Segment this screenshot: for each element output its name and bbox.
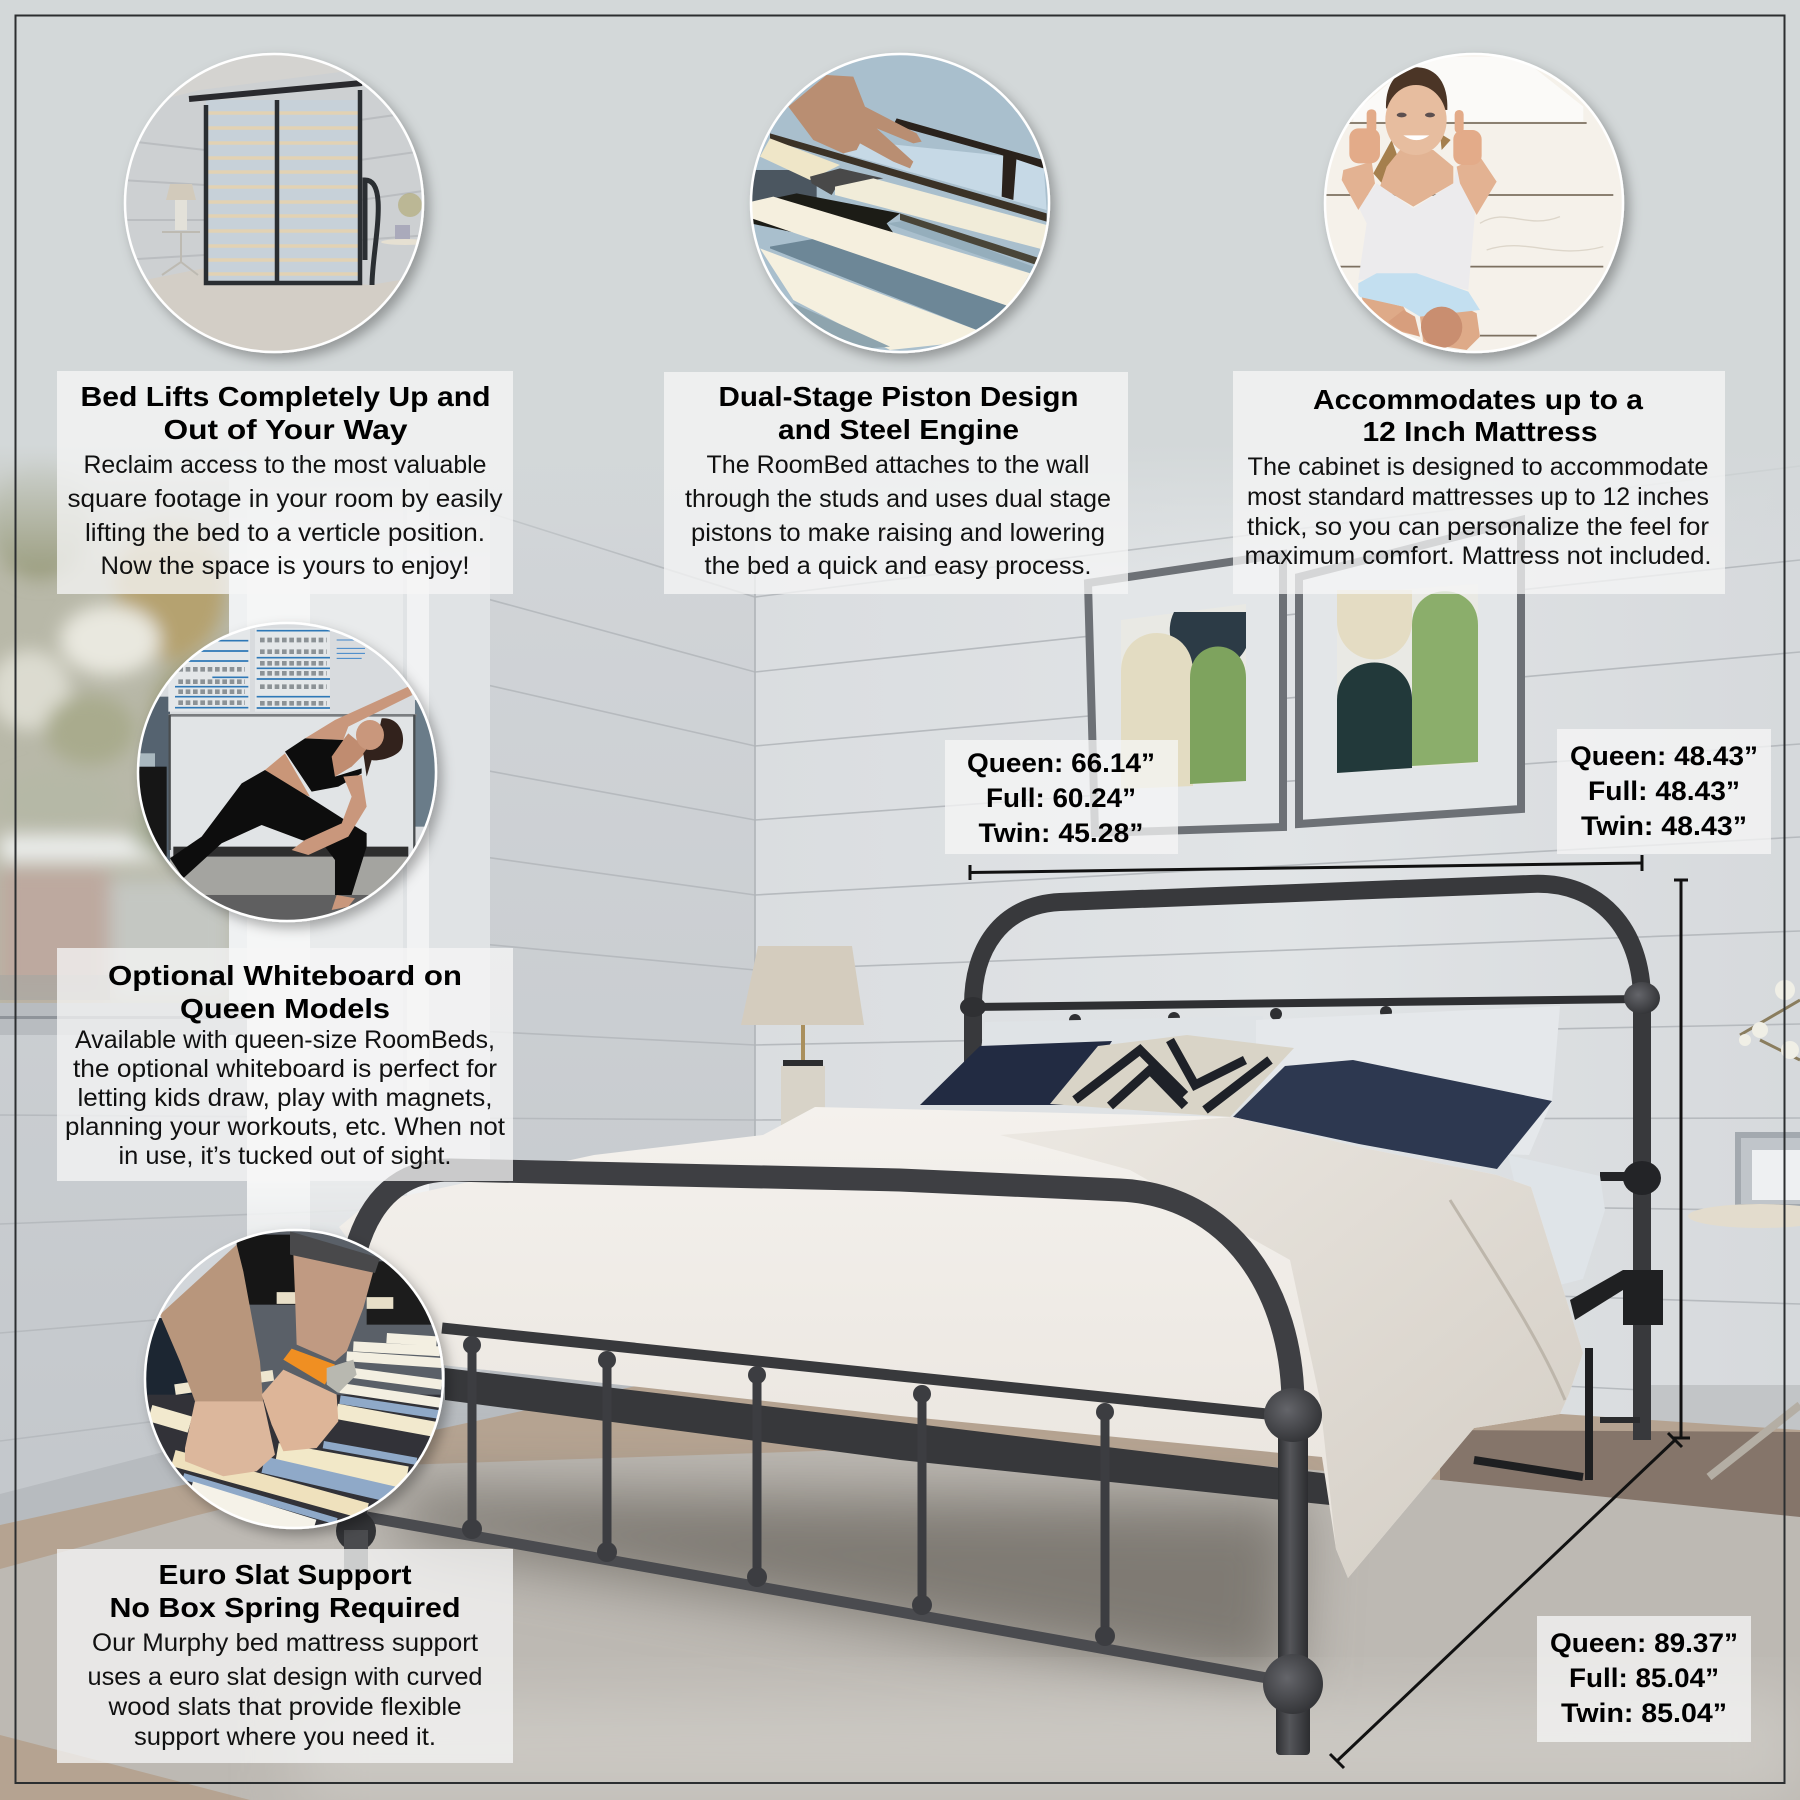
ring xyxy=(125,54,423,352)
photo: bed lifted against wall xyxy=(120,50,430,360)
dimension label: length: Full: 85.04” xyxy=(1569,1663,1719,1693)
body copy: The RoomBed attaches to the wall xyxy=(706,451,1090,479)
photo: slats and steel engine xyxy=(750,50,1050,355)
rug xyxy=(0,1445,1800,1800)
body copy: lifting the bed to a verticle position. xyxy=(85,519,485,547)
dimension label: height: Twin: 48.43” xyxy=(1581,811,1747,841)
body copy: pistons to make raising and lowering xyxy=(691,519,1105,547)
window view xyxy=(0,440,247,1050)
frame rear xyxy=(1474,1270,1640,1480)
body copy xyxy=(65,1026,505,1170)
body copy: wood slats that provide flexible xyxy=(107,1693,462,1721)
body copy xyxy=(685,451,1111,580)
dimension label: width xyxy=(945,740,1178,854)
arrow: length dimension line xyxy=(1330,1433,1682,1768)
body copy xyxy=(68,451,503,580)
body copy: Available with queen-size RoomBeds, xyxy=(75,1026,495,1054)
curtain xyxy=(247,532,490,1371)
headboard xyxy=(960,884,1663,1440)
heading line 2: Queen Models xyxy=(180,993,390,1024)
photo: hands adjusting euro slats xyxy=(140,1228,445,1533)
heading: Optional Whiteboard on xyxy=(108,960,462,991)
ring xyxy=(751,54,1049,352)
dimension label: width: Queen: 66.14” xyxy=(967,748,1155,778)
body copy: letting kids draw, play with magnets, xyxy=(78,1084,492,1112)
ring xyxy=(145,1230,443,1528)
pillows xyxy=(920,1006,1560,1169)
body copy: in use, it’s tucked out of sight. xyxy=(118,1142,451,1170)
heading: Dual-Stage Piston Design xyxy=(718,381,1078,412)
text panel: mattress xyxy=(1233,371,1725,594)
photo: yoga in front of whiteboard xyxy=(135,620,440,925)
side table with picture and plant xyxy=(1688,980,1800,1477)
text panel: euro slat support xyxy=(57,1549,513,1763)
text panel: piston design xyxy=(664,372,1128,594)
text panel: whiteboard xyxy=(57,948,513,1181)
dimension label: width: Twin: 45.28” xyxy=(978,818,1144,848)
dimension label: length xyxy=(1537,1616,1751,1742)
body copy: Now the space is yours to enjoy! xyxy=(100,552,470,580)
heading line 2: No Box Spring Required xyxy=(110,1592,460,1623)
photo: woman with thumbs up on mattress xyxy=(1320,50,1625,355)
bed xyxy=(336,884,1663,1755)
body copy: square footage in your room by easily xyxy=(68,485,503,513)
dimension label: length: Twin: 85.04” xyxy=(1561,1698,1727,1728)
body copy: through the studs and uses dual stage xyxy=(685,485,1111,513)
heading: Bed Lifts Completely Up and xyxy=(80,381,490,412)
body copy: most standard mattresses up to 12 inches xyxy=(1247,483,1709,511)
body copy: planning your workouts, etc. When not xyxy=(65,1113,505,1141)
body copy: support where you need it. xyxy=(134,1723,436,1751)
duvet xyxy=(339,1107,1583,1578)
dimension label: height xyxy=(1557,729,1771,854)
body copy: uses a euro slat design with curved xyxy=(88,1663,482,1691)
dimension label: height: Queen: 48.43” xyxy=(1570,741,1758,771)
body copy xyxy=(1244,453,1712,570)
footboard xyxy=(336,1170,1323,1755)
body copy: Our Murphy bed mattress support xyxy=(92,1629,478,1657)
heading line 2: and Steel Engine xyxy=(778,414,1019,445)
room background xyxy=(0,460,1800,1800)
dimension label: length: Queen: 89.37” xyxy=(1550,1628,1738,1658)
side rail xyxy=(445,1368,1330,1505)
text panel: bed lifts xyxy=(57,371,513,594)
body copy: maximum comfort. Mattress not included. xyxy=(1244,542,1712,570)
body copy xyxy=(88,1629,482,1751)
arrow: height dimension line xyxy=(1672,880,1690,1438)
lamp xyxy=(741,946,864,1126)
mattress side xyxy=(1508,1155,1605,1290)
heading: Accommodates up to a xyxy=(1313,384,1643,415)
heading line 2: Out of Your Way xyxy=(164,414,408,445)
ring xyxy=(138,623,436,921)
dimension label: width: Full: 60.24” xyxy=(986,783,1136,813)
body copy: the bed a quick and easy process. xyxy=(704,552,1092,580)
arrow: width dimension line xyxy=(970,855,1642,880)
body copy: Reclaim access to the most valuable xyxy=(84,451,486,479)
dimension label: height: Full: 48.43” xyxy=(1588,776,1740,806)
body copy: the optional whiteboard is perfect for xyxy=(73,1055,497,1083)
body copy: The cabinet is designed to accommodate xyxy=(1248,453,1708,481)
heading line 2: 12 Inch Mattress xyxy=(1362,416,1598,447)
ring xyxy=(1325,54,1623,352)
body copy: thick, so you can personalize the feel for xyxy=(1247,513,1709,541)
wall art right xyxy=(1299,520,1521,824)
wall art left xyxy=(1088,554,1283,833)
heading: Euro Slat Support xyxy=(158,1559,412,1590)
throw blanket xyxy=(1000,1117,1583,1578)
